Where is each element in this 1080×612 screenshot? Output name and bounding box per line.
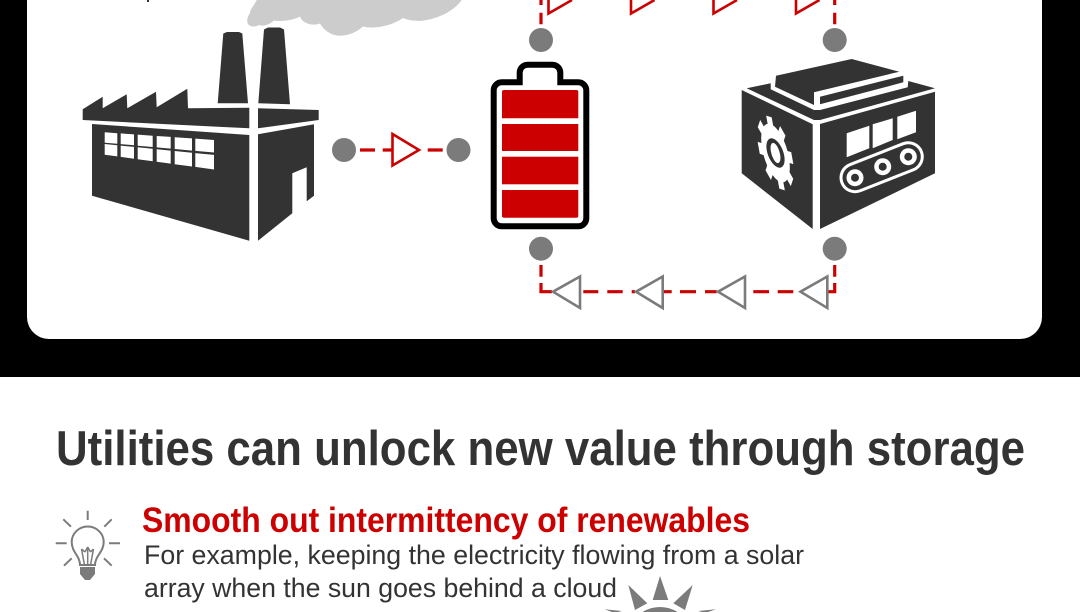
- arrow: battery to machine (top path): [529, 0, 847, 52]
- icon: industrial machine: [742, 59, 935, 229]
- arrow: machine to battery (bottom path): [529, 237, 847, 308]
- icon: conveyor belt: [846, 148, 917, 186]
- subheading: smooth out intermittency: Smooth out intermittency of renewables: [142, 501, 750, 540]
- icon: factory: [83, 28, 319, 241]
- text block: solar example: [144, 540, 804, 603]
- clipped text fragment: [147, 0, 149, 2]
- icon: battery: [494, 65, 586, 226]
- text block: solar example: For example, keeping the electricity flowing from a solar: [144, 540, 804, 570]
- arrow: factory to battery: [332, 134, 470, 166]
- icon: smoke cloud: [247, 0, 462, 36]
- icon: light bulb: [56, 511, 120, 580]
- icon: gear: [752, 111, 799, 195]
- panel: storage cycle diagram: [27, 0, 1042, 339]
- icon: sun: [604, 576, 716, 612]
- text block: solar example: array when the sun goes behind a cloud: [144, 573, 617, 603]
